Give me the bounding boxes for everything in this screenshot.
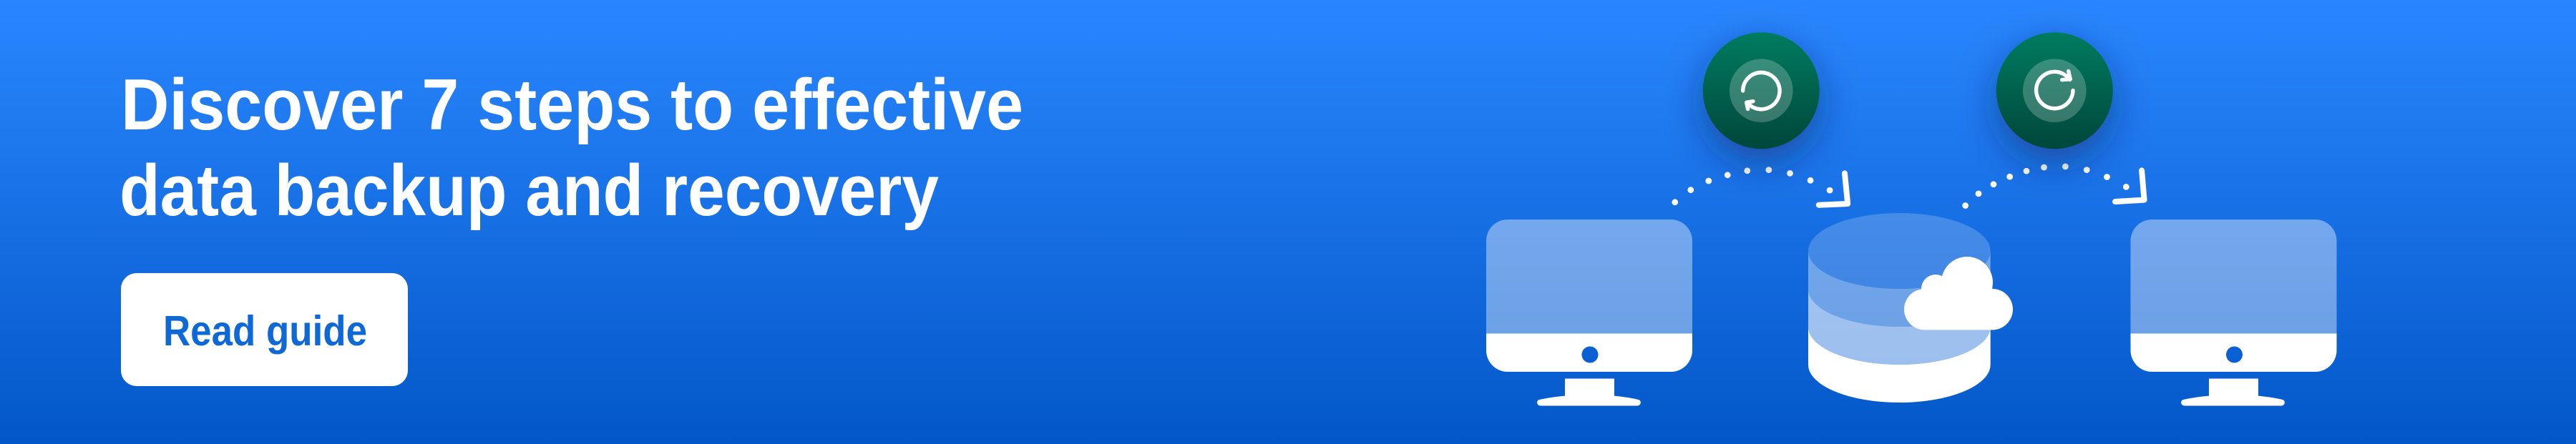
icon: source computer — [1486, 219, 1692, 406]
title — [119, 65, 1023, 231]
icon: backup circle — [1703, 32, 1820, 149]
title: data backup and recovery — [119, 151, 939, 231]
icon: target computer — [2131, 219, 2337, 406]
arrow: recovery dotted path — [1962, 163, 2145, 209]
button: read guide — [121, 273, 408, 386]
title: Discover 7 steps to effective — [121, 65, 1023, 145]
icon: cloud — [1904, 257, 2013, 330]
button: read guide: Read guide — [163, 307, 367, 355]
arrow: backup dotted path — [1672, 167, 1848, 205]
icon: recovery circle — [1996, 32, 2113, 149]
icon: database cylinder — [1808, 213, 1991, 403]
